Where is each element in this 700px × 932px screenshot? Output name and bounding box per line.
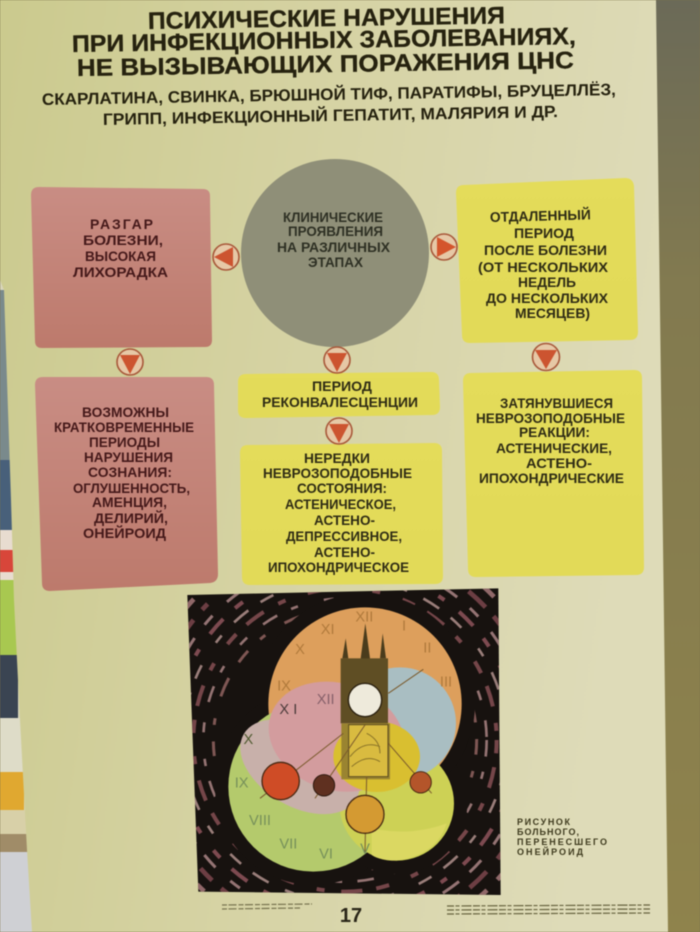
roman numerals: X xyxy=(243,732,253,748)
arrow: down from convalescence xyxy=(326,418,352,444)
panel: neurosis-like states: НЕРЕДКИ xyxy=(304,450,370,466)
roman numerals: X xyxy=(295,642,305,658)
panel: possible brief disturbances of consciousness: НАРУШЕНИЯ xyxy=(84,449,173,465)
panel: possible brief disturbances of consciousness: КРАТКОВРЕМЕННЫЕ xyxy=(54,419,194,435)
panel: neurosis-like states: АСТЕНО- xyxy=(314,512,375,528)
panel: possible brief disturbances of consciousness: ВОЗМОЖНЫ xyxy=(82,404,169,420)
panel: possible brief disturbances of consciousness: ПЕРИОДЫ xyxy=(89,434,160,450)
panel: neurosis-like states: АСТЕНО- xyxy=(314,544,375,560)
coloured discs xyxy=(224,607,462,872)
panel: central circle, clinical manifestations: ПРОЯВЛЕНИЯ xyxy=(288,224,383,239)
caption for the drawing: РИСУНОК xyxy=(517,817,570,827)
panel: remote period after illness: ОТДАЛЕННЫЙ xyxy=(490,205,591,225)
panel: height of illness: ЛИХОРАДКА xyxy=(73,264,168,280)
arrow: down from remote period xyxy=(532,344,560,370)
black halo behind discs xyxy=(228,607,462,872)
roman numerals: V xyxy=(360,841,370,857)
panel: neurosis-like states: ДЕПРЕССИВНОЕ, xyxy=(286,528,402,544)
swirling pink brush strokes xyxy=(187,588,502,896)
panel: remote period after illness: НЕДЕЛЬ xyxy=(518,274,576,290)
small print left xyxy=(222,904,312,909)
panel: remote period after illness: МЕСЯЦЕВ) xyxy=(515,305,590,321)
panel: neurosis-like states: СОСТОЯНИЯ: xyxy=(297,480,387,496)
neighbouring poster strip at left edge xyxy=(0,0,40,932)
panel: prolonged neurosis-like reactions: АСТЕНИЧЕСКИЕ, xyxy=(496,440,612,456)
roman numerals: VI xyxy=(319,846,333,862)
caption for the drawing: ПЕРЕНЕСШЕГО xyxy=(517,837,607,847)
panel: central circle, clinical manifestations: ЭТАПАХ xyxy=(308,255,363,270)
panel: convalescence period xyxy=(238,372,440,418)
caption for the drawing xyxy=(517,817,607,857)
caption for the drawing: БОЛЬНОГО, xyxy=(517,827,579,837)
arrow: left to height of illness xyxy=(213,244,239,270)
panel: remote period after illness: ПОСЛЕ БОЛЕЗНИ xyxy=(484,242,607,258)
title xyxy=(72,2,576,82)
panel: convalescence period: РЕКОНВАЛЕСЦЕНЦИИ xyxy=(262,394,418,410)
roman numerals: II xyxy=(423,641,431,657)
panel: height of illness: РАЗГАР xyxy=(90,216,153,232)
panel: prolonged neurosis-like reactions xyxy=(463,370,644,577)
panel: neurosis-like states xyxy=(240,443,443,585)
title: НЕ ВЫЗЫВАЮЩИХ ПОРАЖЕНИЯ ЦНС xyxy=(77,47,574,82)
arrow: right to remote period xyxy=(431,234,457,260)
panel: convalescence period: ПЕРИОД xyxy=(312,378,372,394)
panel: central circle, clinical manifestations: КЛИНИЧЕСКИЕ xyxy=(283,210,383,225)
arrow: down from height of illness xyxy=(117,349,143,375)
panel: prolonged neurosis-like reactions: ЗАТЯНУВШИЕСЯ xyxy=(500,395,613,411)
page number: 17 xyxy=(340,905,362,927)
panel: height of illness: БОЛЕЗНИ, xyxy=(83,232,163,248)
panel: neurosis-like states: НЕВРОЗОПОДОБНЫЕ xyxy=(263,465,412,481)
panel: possible brief disturbances of consciousness: СОЗНАНИЯ: xyxy=(88,464,172,480)
clock tower xyxy=(341,623,390,779)
roman numerals: XI xyxy=(321,622,335,638)
pendulum balls xyxy=(262,762,431,833)
subtitle: list of diseases xyxy=(42,80,616,129)
roman numerals xyxy=(235,610,452,862)
arrow: down from circle xyxy=(324,347,350,373)
panel: central circle, clinical manifestations: НА РАЗЛИЧНЫХ xyxy=(277,240,390,255)
panel: remote period after illness: ПЕРИОД xyxy=(514,225,574,241)
roman numerals: VII xyxy=(279,836,297,852)
panel: possible brief disturbances of consciousness: ДЕЛИРИЙ, xyxy=(94,509,168,526)
subtitle: list of diseases: СКАРЛАТИНА, СВИНКА, БРЮШНОЙ ТИФ, ПАРАТИФЫ, БРУЦЕЛЛЁЗ, xyxy=(42,80,616,109)
panel: remote period after illness xyxy=(456,178,638,343)
roman numerals: XII xyxy=(355,610,373,626)
panel: prolonged neurosis-like reactions: НЕВРОЗОПОДОБНЫЕ xyxy=(476,410,625,426)
panel: prolonged neurosis-like reactions: РЕАКЦИИ: xyxy=(519,424,590,440)
panel: prolonged neurosis-like reactions: АСТЕНО- xyxy=(526,455,592,471)
panel: neurosis-like states: ИПОХОНДРИЧЕСКОЕ xyxy=(268,559,409,575)
panel: possible brief disturbances of consciousness: АМЕНЦИЯ, xyxy=(92,494,167,510)
panel: central circle, clinical manifestations xyxy=(241,159,429,347)
panel: possible brief disturbances of consciousness xyxy=(35,377,218,591)
title: ПРИ ИНФЕКЦИОННЫХ ЗАБОЛЕВАНИЯХ, xyxy=(72,23,576,58)
panel: possible brief disturbances of consciousness: ОНЕЙРОИД xyxy=(83,524,166,541)
roman numerals: X I xyxy=(279,702,297,718)
roman numerals: III xyxy=(440,675,452,691)
pendulum lines xyxy=(260,669,432,852)
subtitle: list of diseases: ГРИПП, ИНФЕКЦИОННЫЙ ГЕПАТИТ, МАЛЯРИЯ И ДР. xyxy=(103,102,558,129)
roman numerals: VIII xyxy=(249,813,271,829)
roman numerals: XII xyxy=(317,692,335,708)
panel: height of illness: ВЫСОКАЯ xyxy=(85,248,156,264)
small print right xyxy=(447,905,650,914)
panel: possible brief disturbances of consciousness: ОГЛУШЕННОСТЬ, xyxy=(73,480,190,496)
roman numerals: I xyxy=(402,619,406,635)
roman numerals: IX xyxy=(235,775,249,791)
caption for the drawing: ОНЕЙРОИД xyxy=(517,846,584,857)
panel: neurosis-like states: АСТЕНИЧЕСКОЕ, xyxy=(285,496,396,512)
panel: prolonged neurosis-like reactions: ИПОХОНДРИЧЕСКИЕ xyxy=(479,470,624,486)
roman numerals: IX xyxy=(277,679,291,695)
panel: height of illness xyxy=(31,187,212,348)
title: ПСИХИЧЕСКИЕ НАРУШЕНИЯ xyxy=(148,2,505,35)
panel: remote period after illness: ДО НЕСКОЛЬКИХ xyxy=(486,290,609,306)
patient's drawing: clock painting xyxy=(186,588,502,896)
panel: remote period after illness: (ОТ НЕСКОЛЬКИХ xyxy=(478,259,609,275)
